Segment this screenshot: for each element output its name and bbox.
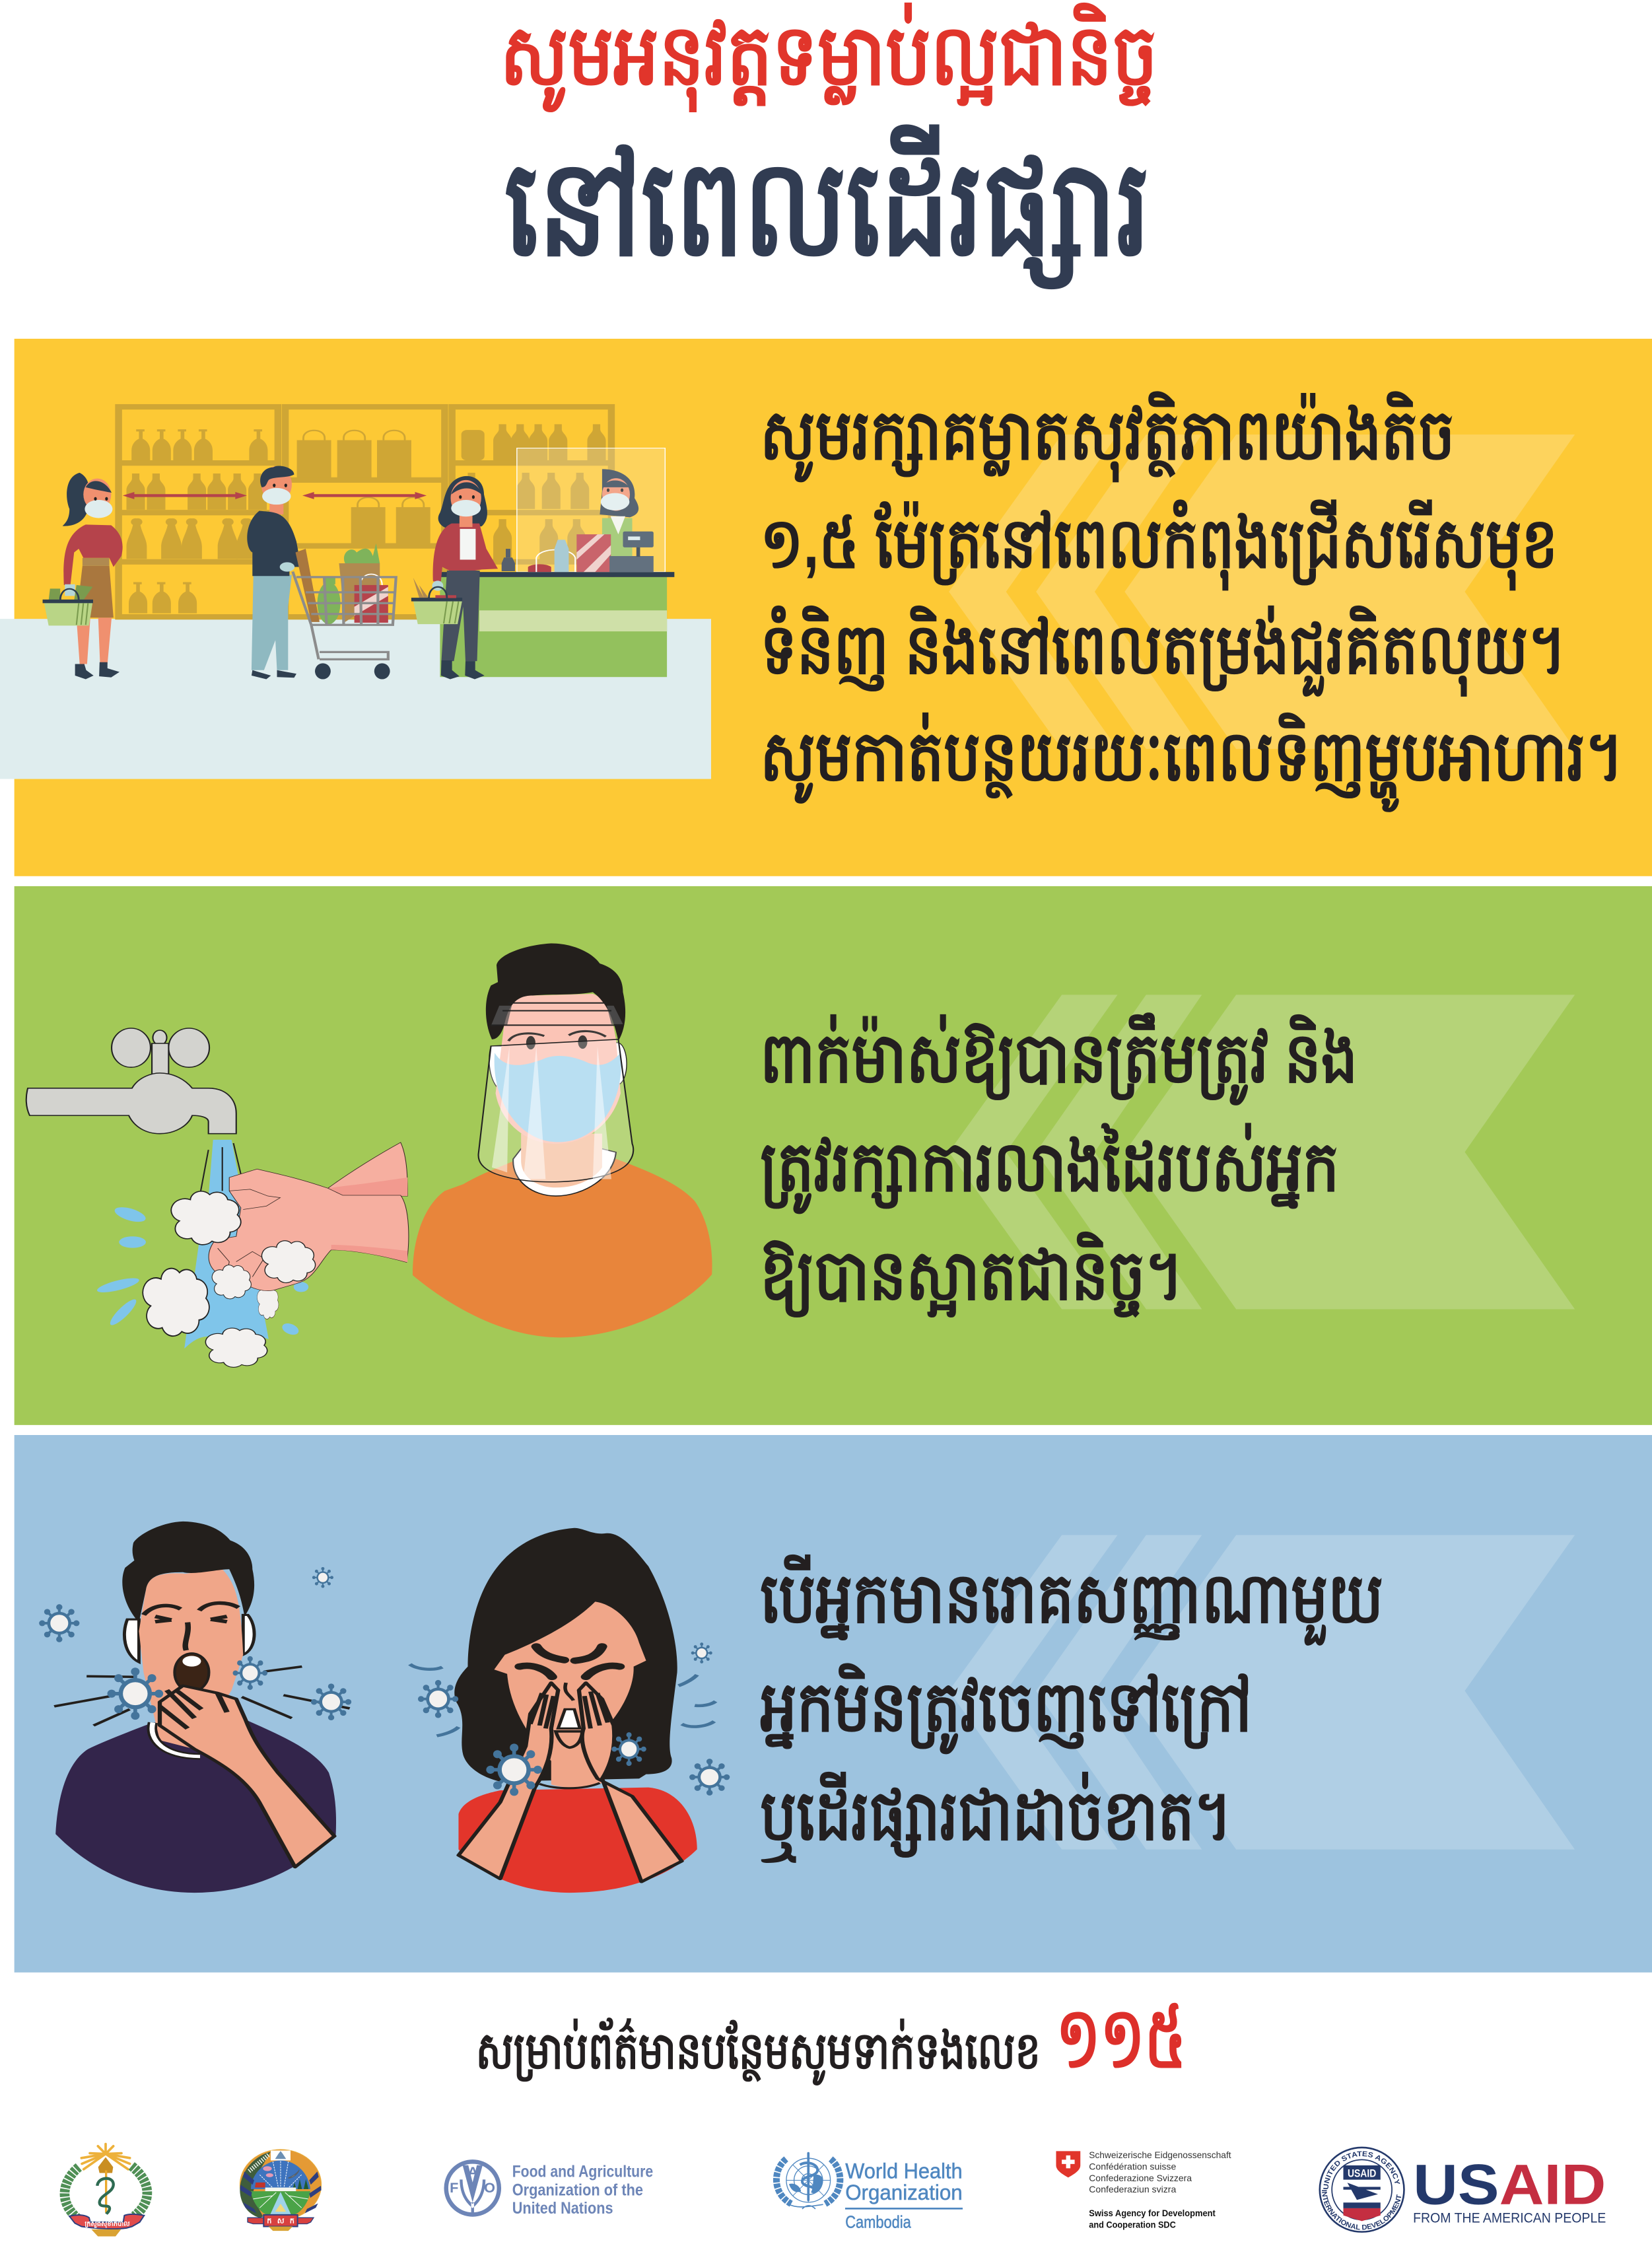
logo: Ministry of Agriculture emblem: ក ស ក bbox=[267, 2218, 294, 2225]
soap foam bbox=[143, 1191, 316, 1367]
text: mask and hand wash message: ត្រូវរក្សាការលាងដៃរបស់អ្នក bbox=[760, 1123, 1339, 1214]
sneezing woman bbox=[410, 1528, 716, 1893]
SDC wording: Confédération suisse bbox=[1089, 2161, 1176, 2171]
WHO name bbox=[845, 2159, 963, 2231]
counter top and items bbox=[439, 532, 674, 577]
WHO name: World Health bbox=[845, 2159, 963, 2183]
woman with ponytail and basket bbox=[43, 473, 123, 679]
logo: Ministry of Agriculture emblem bbox=[240, 2150, 322, 2231]
woman at counter with basket bbox=[411, 476, 498, 679]
water tap bbox=[26, 1028, 236, 1134]
chevrons yellow panel bbox=[949, 435, 1575, 749]
FAO name: United Nations bbox=[512, 2199, 613, 2218]
USAID seal bbox=[1319, 2146, 1405, 2233]
USAID wordmark: US AID bbox=[1413, 2153, 1606, 2216]
logo: USAID bbox=[1319, 2146, 1606, 2233]
water stream and drops bbox=[95, 1140, 308, 1349]
plexiglass shield bbox=[517, 448, 665, 572]
hotline text: សម្រាប់ព័ត៌មានបន្ថែមសូមទាក់ទងលេខ bbox=[476, 2017, 1041, 2085]
text: mask and hand wash message bbox=[760, 1012, 1358, 1317]
logo: FAO bbox=[446, 2161, 653, 2218]
logo: FAO: O bbox=[484, 2179, 495, 2196]
SDC wording: and Cooperation SDC bbox=[1089, 2219, 1176, 2229]
USAID tagline: FROM THE AMERICAN PEOPLE bbox=[1413, 2210, 1606, 2226]
man with shopping cart bbox=[247, 466, 301, 679]
SDC wording: Schweizerische Eidgenossenschaft bbox=[1089, 2150, 1231, 2160]
chevrons green panel bbox=[949, 995, 1575, 1310]
text: mask and hand wash message: ឱ្យបានស្អាតជានិច្ច។ bbox=[760, 1231, 1183, 1317]
panel: keep distance while shopping bbox=[0, 339, 1652, 876]
text: mask and hand wash message: ពាក់ម៉ាស់ឱ្យបានត្រឹមត្រូវ និង bbox=[760, 1012, 1358, 1105]
FAO name: Organization of the bbox=[512, 2181, 643, 2199]
logo: Swiss Agency SDC bbox=[1056, 2150, 1231, 2229]
logo: Ministry of Health emblem bbox=[65, 2144, 147, 2237]
illustration: washing hands and face shield bbox=[26, 943, 712, 1367]
transparent face shield bbox=[479, 1003, 633, 1182]
cashier bbox=[600, 469, 638, 556]
text: keep distance message bbox=[760, 391, 1624, 813]
logo: FAO: A bbox=[467, 2163, 478, 2180]
illustration: coughing and sneezing people bbox=[39, 1522, 730, 1893]
title: red Khmer line: សូមអនុវត្តទម្លាប់ល្អជានិច្ច bbox=[500, 3, 1157, 113]
text: symptoms message: បើអ្នកមានរោគសញ្ញាណាមួយ bbox=[760, 1555, 1383, 1646]
viruses around man bbox=[39, 1567, 351, 1720]
USAID seal: UNITED STATES AGENCY bbox=[1323, 2152, 1400, 2189]
chevrons blue panel bbox=[949, 1535, 1575, 1850]
panel: stay home if symptoms bbox=[15, 1435, 1652, 1973]
text: symptoms message bbox=[760, 1555, 1383, 1864]
logo: World Health Organization bbox=[776, 2154, 963, 2231]
hotline number: ១១៥ bbox=[1056, 1991, 1186, 2085]
text: keep distance message: សូមរក្សាគម្លាតសុវត្ថិភាពយ៉ាងតិច bbox=[760, 391, 1455, 483]
shelves bbox=[119, 407, 611, 617]
coughing man bbox=[54, 1522, 350, 1893]
checkout counter bbox=[440, 577, 667, 677]
USAID seal: USAID bbox=[1348, 2167, 1377, 2179]
logo: Ministry of Health emblem: ក្រសួងសុខាភិបាល bbox=[85, 2220, 130, 2229]
WHO name: Cambodia bbox=[845, 2212, 911, 2231]
title: navy Khmer line: នៅពេលដើរផ្សារ bbox=[504, 124, 1150, 289]
WHO name: Organization bbox=[845, 2181, 963, 2204]
FAO name bbox=[512, 2162, 653, 2218]
FAO name: Food and Agriculture bbox=[512, 2162, 653, 2181]
SDC wording: Confederazione Svizzera bbox=[1089, 2173, 1192, 2183]
man with face shield bbox=[413, 943, 712, 1337]
distance arrows bbox=[123, 492, 427, 499]
hands bbox=[209, 1142, 409, 1319]
logo: FAO: F bbox=[450, 2179, 458, 2196]
USAID seal: INTERNATIONAL DEVELOPMENT bbox=[1322, 2190, 1401, 2229]
SDC wording: Confederaziun svizra bbox=[1089, 2184, 1176, 2194]
floor band bbox=[0, 619, 711, 779]
viruses around woman bbox=[418, 1642, 730, 1796]
cart with groceries bbox=[293, 543, 396, 679]
SDC wording bbox=[1089, 2150, 1231, 2229]
SDC wording: Swiss Agency for Development bbox=[1089, 2208, 1216, 2218]
illustration: supermarket queue bbox=[43, 407, 674, 679]
panel: mask and hand washing bbox=[15, 886, 1652, 1425]
text: symptoms message: អ្នកមិនត្រូវចេញទៅក្រៅ bbox=[760, 1663, 1252, 1755]
text: symptoms message: ឬដើរផ្សារជាដាច់ខាត។ bbox=[760, 1772, 1232, 1864]
